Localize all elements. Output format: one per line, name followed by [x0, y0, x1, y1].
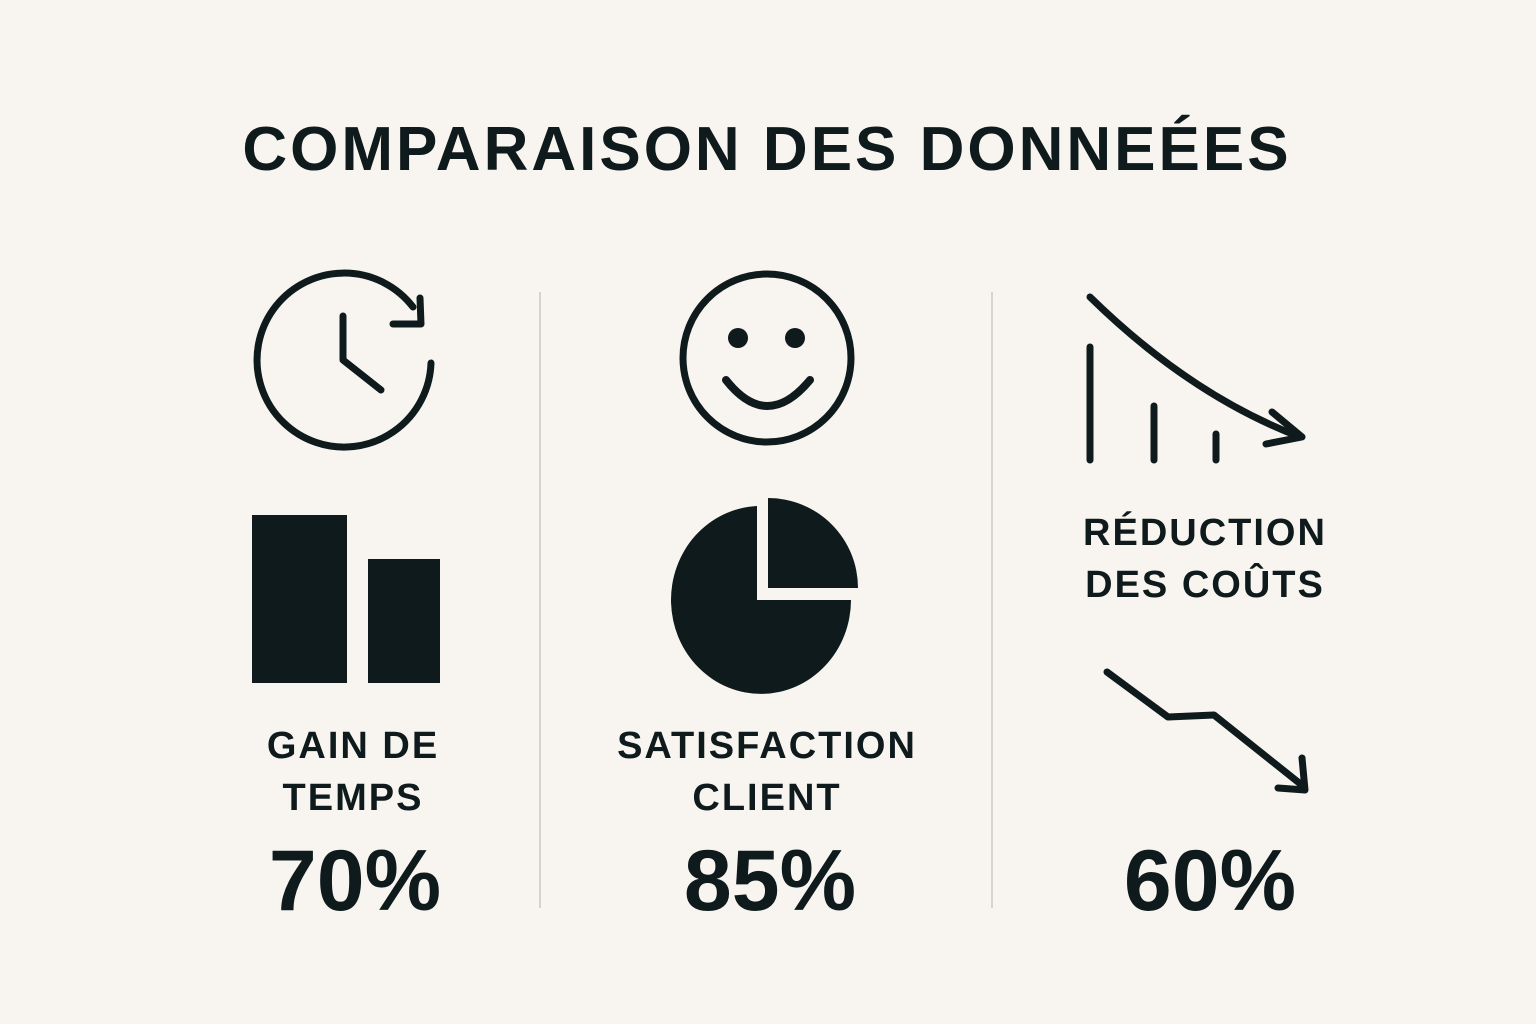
icon: declining chart [1090, 297, 1302, 460]
title: COMPARAISON DES DONNEÉES [242, 115, 1292, 184]
value: 85% [684, 833, 856, 929]
icon: pie chart [671, 498, 858, 694]
icon: clock [257, 273, 431, 447]
icon: zigzag arrow [1107, 672, 1305, 790]
panel: réduction des coûts: DES COÛTS [1085, 561, 1325, 606]
panel: satisfaction client [617, 274, 917, 929]
icon: bar chart [252, 515, 440, 683]
label: GAIN DE [267, 725, 439, 767]
panel: satisfaction client: CLIENT [692, 777, 842, 819]
value: 60% [1124, 833, 1296, 929]
label: SATISFACTION [617, 725, 917, 767]
value: 70% [269, 833, 441, 929]
panel: gain de temps: TEMPS [283, 777, 423, 819]
panel: réduction des coûts [1083, 297, 1327, 929]
panel: gain de temps [252, 273, 441, 929]
icon: smiley [683, 274, 851, 442]
label: RÉDUCTION [1083, 510, 1327, 554]
